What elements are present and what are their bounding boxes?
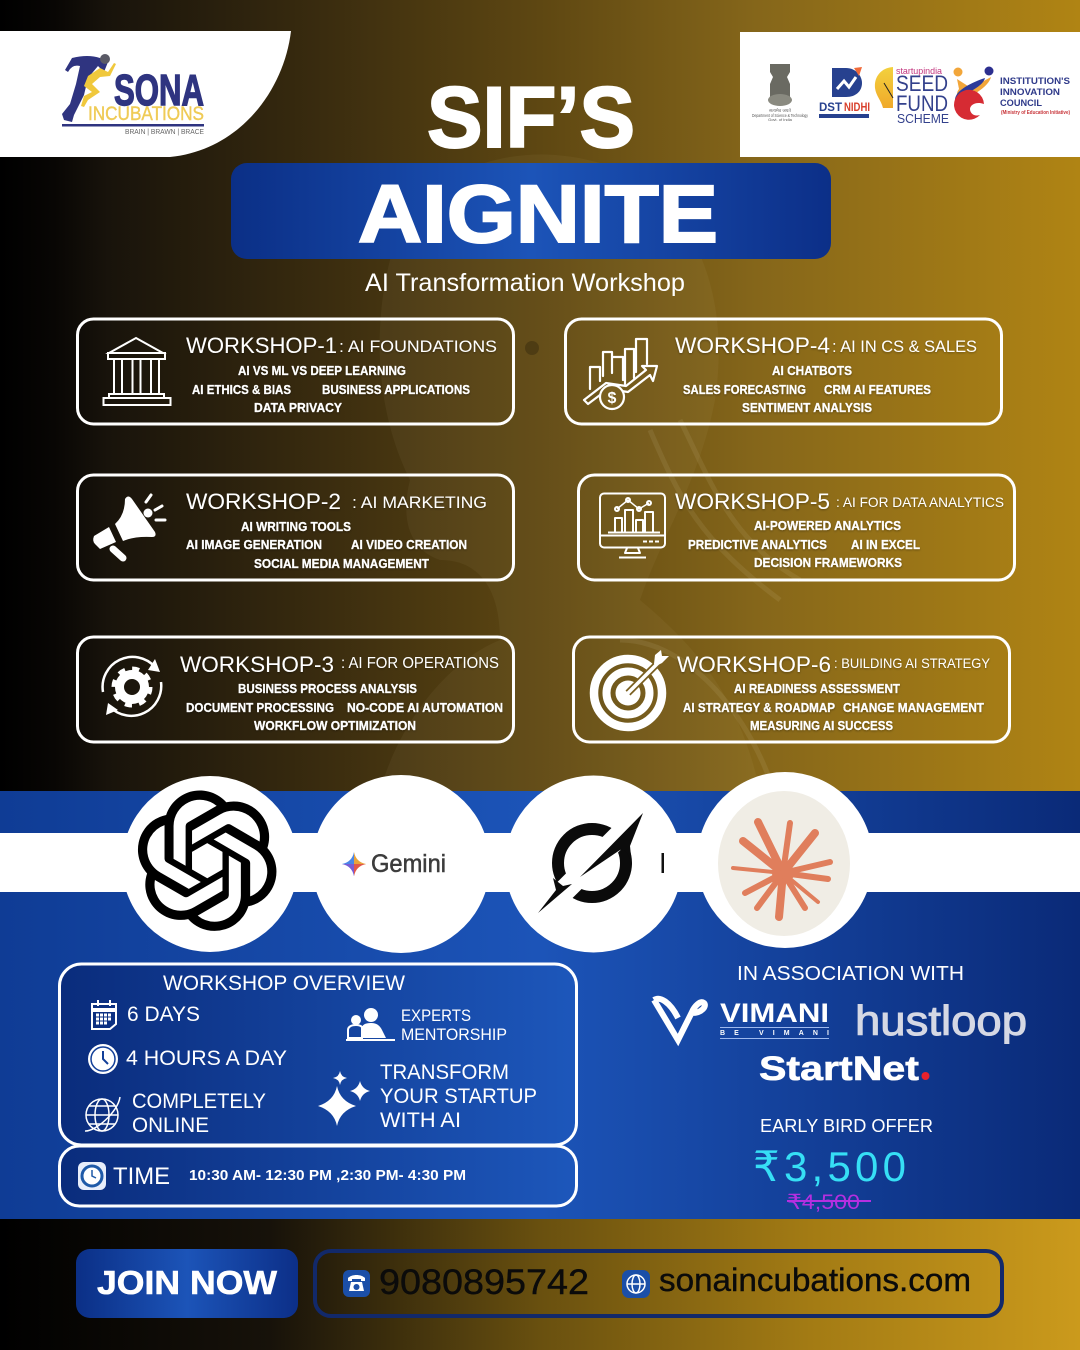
- logo: DST NIDHI: [819, 67, 870, 118]
- panel: workshop 4: [566, 319, 1002, 424]
- topics: AI-POWERED ANALYTICS: [754, 519, 901, 533]
- title: SIF'S: SIF’S: [427, 70, 635, 166]
- icon: growth chart: $: [608, 390, 617, 407]
- icon: analytics monitor: [600, 494, 665, 558]
- text: experts mentorship: EXPERTS: [401, 1007, 471, 1025]
- logo panel: Sona Incubations: [0, 31, 291, 157]
- icon: mentors: [346, 1008, 395, 1041]
- topics: [186, 682, 503, 733]
- text: transform: YOUR STARTUP: [380, 1085, 537, 1108]
- panel: workshop 6: [574, 637, 1010, 742]
- topics: AI WRITING TOOLS: [241, 520, 351, 534]
- topics: SOCIAL MEDIA MANAGEMENT: [254, 557, 429, 571]
- icon: sparkles: [318, 1071, 370, 1126]
- topics: PREDICTIVE ANALYTICS: [688, 538, 827, 552]
- topics: AI STRATEGY & ROADMAP: [683, 701, 835, 715]
- icon: target: [594, 650, 669, 727]
- logo: Seed Fund Scheme: SEED: [896, 71, 948, 96]
- topics: SENTIMENT ANALYSIS: [742, 401, 872, 415]
- panel: workshop 1: [78, 319, 514, 424]
- logo: Vimani: BE VIMANI: [720, 1030, 829, 1037]
- panel: workshop 6: : BUILDING AI STRATEGY: [834, 655, 991, 671]
- panel: workshop 2: : AI MARKETING: [352, 493, 487, 512]
- subtitle: AI Transformation Workshop: [365, 269, 685, 297]
- text: experts mentorship: [401, 1007, 507, 1044]
- icon: globe: [85, 1097, 120, 1131]
- title banner: AIGNITE: AIGNITE: [358, 169, 718, 260]
- logo: Claude-style burst: [697, 772, 873, 948]
- heading: WORKSHOP-4: [675, 333, 830, 358]
- topics: AI CHATBOTS: [772, 364, 852, 378]
- old price: ₹4,500: [787, 1191, 860, 1214]
- topics: MEASURING AI SUCCESS: [750, 719, 893, 733]
- text: transform: WITH AI: [380, 1109, 461, 1132]
- icon: clock: [88, 1044, 118, 1074]
- topics: AI ETHICS & BIAS: [192, 383, 291, 397]
- wordmark: INCUBATIONS: INCUBATIONS: [88, 104, 204, 125]
- topics: SALES FORECASTING: [683, 383, 806, 397]
- icon: phone: [343, 1270, 370, 1297]
- logo panel: partners: [740, 32, 1080, 157]
- logo: Institution's Innovation Council: COUNCIL: [1000, 98, 1042, 109]
- icon: national emblem: Department of Science & Technology: [752, 113, 809, 118]
- topics: WORKFLOW OPTIMIZATION: [254, 719, 416, 733]
- panel: workshop 5: : AI FOR DATA ANALYTICS: [836, 494, 1004, 510]
- logo: Seed Fund Scheme: [875, 66, 949, 126]
- topics: [683, 682, 984, 733]
- icon: national emblem: [752, 64, 809, 122]
- background robot head: [380, 154, 800, 791]
- icon: globe: [622, 1270, 650, 1298]
- heading: WORKSHOP-6: [677, 652, 831, 677]
- panel: workshop 3: [78, 637, 514, 742]
- logo: Gemini: [312, 775, 490, 953]
- text: 4 hours: 4 HOURS A DAY: [126, 1047, 287, 1070]
- white stripe: [0, 833, 1080, 892]
- topics: AI IN EXCEL: [851, 538, 920, 552]
- logo: Vimani: VIMANI: [720, 998, 829, 1028]
- topics: DOCUMENT PROCESSING: [186, 701, 334, 715]
- icon: growth chart: [584, 339, 657, 409]
- logo: Gemini: Gemini: [371, 850, 446, 878]
- panel: time: [60, 1146, 576, 1206]
- text: experts mentorship: MENTORSHIP: [401, 1026, 507, 1044]
- logo: ChatGPT: [122, 776, 298, 952]
- topics: [186, 520, 467, 571]
- heading: association: IN ASSOCIATION WITH: [737, 963, 964, 985]
- logo: StartNet: StartNet: [759, 1050, 919, 1088]
- panel: workshop overview: [60, 964, 576, 1145]
- icon: runner: [62, 54, 116, 122]
- heading: WORKSHOP-2: [186, 489, 341, 514]
- tagline: BRAIN | BRAWN | BRACE: [125, 129, 204, 136]
- label: TIME: [113, 1163, 170, 1190]
- logo: Institution's Innovation Council: INSTITUTION'S: [1000, 76, 1070, 87]
- bottom band: [0, 1219, 1080, 1350]
- panel: workshop 5: [578, 475, 1014, 580]
- logo: Seed Fund Scheme: startupindia: [896, 66, 943, 77]
- heading: WORKSHOP-5: [675, 489, 830, 514]
- website: sonaincubations.com: [659, 1262, 971, 1298]
- icon: national emblem: Govt. of India: [768, 117, 793, 122]
- topics: AI IMAGE GENERATION: [186, 538, 322, 552]
- logo: DST NIDHI: DST: [819, 102, 842, 114]
- logo: DST NIDHI: NIDHI: [844, 102, 870, 114]
- topics: DATA PRIVACY: [254, 401, 343, 415]
- phone number: 9080895742: [379, 1263, 589, 1302]
- topics: BUSINESS APPLICATIONS: [322, 383, 470, 397]
- hours: 10:30 AM- 12:30 PM ,2:30 PM- 4:30 PM: [189, 1167, 466, 1184]
- early bird label: EARLY BIRD OFFER: [760, 1116, 933, 1136]
- text: transform: [380, 1061, 537, 1132]
- heading: WORKSHOP OVERVIEW: [163, 972, 405, 995]
- logo: Institution's Innovation Council: [954, 66, 1070, 120]
- button: join now: JOIN NOW: [97, 1264, 278, 1301]
- text: completely online: ONLINE: [132, 1114, 209, 1137]
- price: ₹3,500: [753, 1143, 906, 1190]
- logo: Seed Fund Scheme: SCHEME: [897, 111, 949, 126]
- topics: AI VS ML VS DEEP LEARNING: [238, 364, 406, 378]
- text: transform: TRANSFORM: [380, 1061, 509, 1084]
- blue band: [0, 791, 1080, 1219]
- icon: gear cycle: [103, 657, 161, 716]
- topics: AI READINESS ASSESSMENT: [734, 682, 900, 696]
- heading: WORKSHOP-3: [180, 652, 334, 677]
- wordmark: SONA: SONA: [114, 66, 204, 115]
- icon: bank: [104, 338, 170, 405]
- topics: CRM AI FEATURES: [824, 383, 931, 397]
- logo: Vimani: [654, 998, 829, 1040]
- topics: DECISION FRAMEWORKS: [754, 556, 902, 570]
- panel: workshop 2: [78, 475, 514, 580]
- logo: Institution's Innovation Council: INNOVATION: [1000, 87, 1060, 98]
- icon: calendar: [92, 1000, 116, 1029]
- topics: [192, 364, 470, 415]
- icon: national emblem: सत्यमेव जयते: [769, 107, 791, 113]
- panel: workshop 3: : AI FOR OPERATIONS: [341, 655, 499, 672]
- text: 6 days: 6 DAYS: [127, 1003, 200, 1026]
- topics: BUSINESS PROCESS ANALYSIS: [238, 682, 417, 696]
- topics: [688, 519, 920, 570]
- panel: workshop 4: : AI IN CS & SALES: [832, 337, 977, 356]
- topics: [683, 364, 931, 415]
- logo: hustloop: hustloop: [855, 997, 1027, 1044]
- button: join now: [76, 1249, 298, 1318]
- text: completely online: [132, 1090, 266, 1137]
- topics: CHANGE MANAGEMENT: [843, 701, 984, 715]
- icon: megaphone: [93, 495, 165, 558]
- heading: WORKSHOP-1: [186, 333, 337, 358]
- topics: NO-CODE AI AUTOMATION: [347, 701, 503, 715]
- text: completely online: COMPLETELY: [132, 1090, 266, 1113]
- icon: clock tile: [78, 1162, 106, 1190]
- topics: AI VIDEO CREATION: [351, 538, 467, 552]
- title banner: AIGNITE: [231, 163, 831, 260]
- logo: Grok-style mark: [505, 776, 682, 952]
- logo: Seed Fund Scheme: FUND: [896, 91, 948, 116]
- panel: workshop 1: : AI FOUNDATIONS: [339, 337, 497, 356]
- panel: contact: [315, 1251, 1002, 1316]
